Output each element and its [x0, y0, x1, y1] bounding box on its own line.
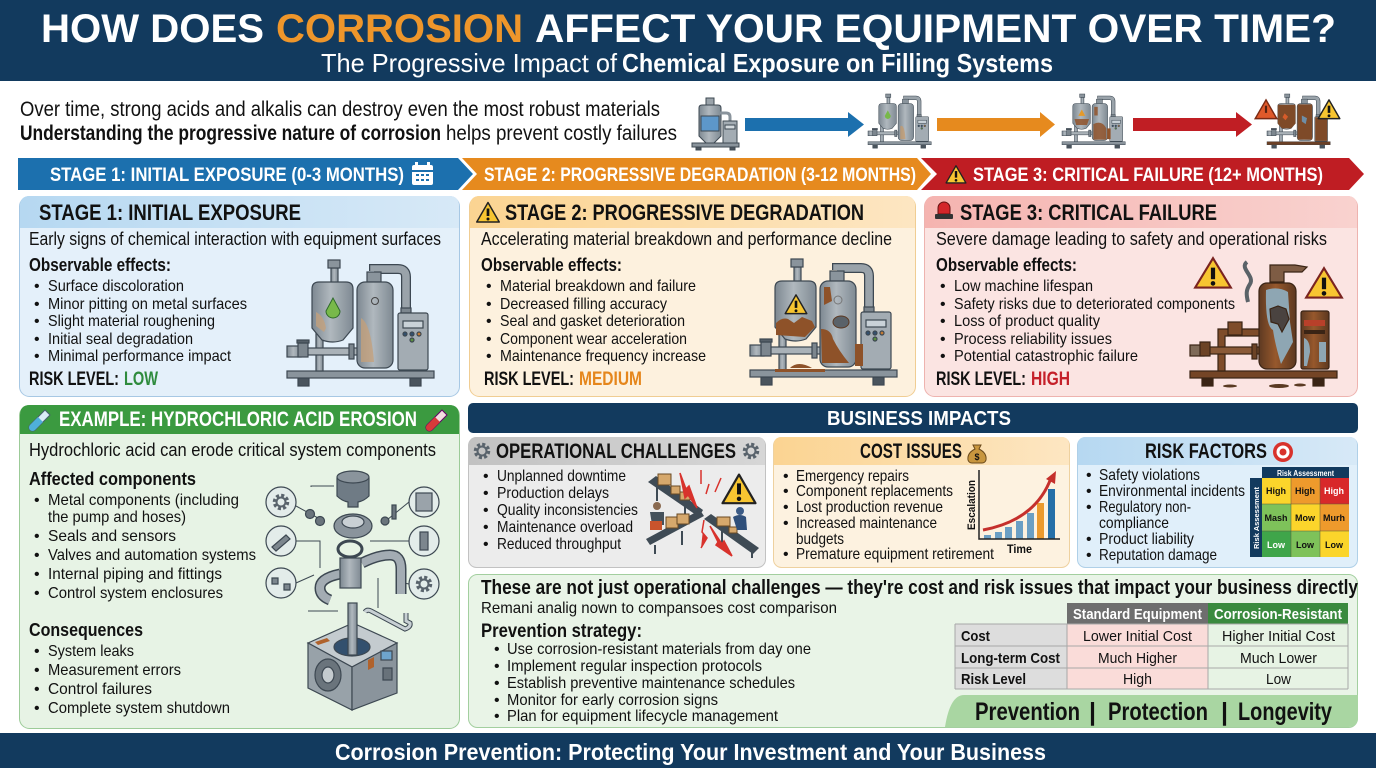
icon: warning left: [1195, 258, 1231, 288]
comparison table: High: [1123, 671, 1152, 688]
prevention strategy list: •: [494, 692, 500, 709]
chart: risk matrix: Murh: [1323, 513, 1345, 523]
intro text: [20, 98, 677, 145]
heading: EXAMPLE: HYDROCHLORIC ACID EROSION: [59, 408, 417, 431]
observable effects list: •: [486, 313, 492, 330]
chevron: stage 2: STAGE 2: PROGRESSIVE DEGRADATION (3-12 MONTHS): [484, 165, 916, 186]
illustration: rusting machine: [750, 259, 897, 385]
illustration: failed machine: [1190, 258, 1342, 388]
panel: stage 1 initial exposure: [20, 196, 460, 396]
slogan band: [945, 695, 1358, 727]
observable effects list: •: [34, 331, 40, 348]
risk level: RISK LEVEL:: [29, 369, 119, 390]
list: •: [1086, 531, 1092, 548]
list: Maintenance overload: [497, 519, 633, 536]
icon: gear right: [744, 444, 758, 458]
consequences list: System leaks: [48, 643, 134, 660]
illustration: exploded pump diagram: [266, 471, 439, 710]
title: CORROSION: [276, 7, 523, 51]
observable effects list: Low machine lifespan: [954, 278, 1093, 295]
list: Environmental incidents: [1099, 483, 1245, 500]
list: •: [1086, 547, 1092, 564]
comparison table: Much Lower: [1240, 650, 1317, 667]
observable effects list: Observable effects:: [29, 255, 171, 275]
panel: prevention and comparison: [468, 574, 1359, 728]
comparison table: Much Higher: [1098, 650, 1177, 667]
list: Lost production revenue: [796, 499, 943, 516]
panel: cost issues: [774, 437, 1070, 568]
chart: risk matrix: Low: [1296, 540, 1315, 550]
observable effects list: [936, 255, 1235, 365]
list: Emergency repairs: [796, 468, 909, 485]
observable effects list: •: [34, 296, 40, 313]
heading: COST ISSUES: [860, 440, 962, 463]
icon: calendar: [412, 162, 433, 185]
risk level: MEDIUM: [579, 369, 642, 390]
prevention strategy list: •: [494, 708, 500, 725]
icon: warning: [722, 475, 756, 503]
comparison table: [955, 603, 1348, 689]
business impacts bar: BUSINESS IMPACTS: [827, 408, 1011, 430]
observable effects list: [29, 255, 247, 365]
prevention strategy list: Plan for equipment lifecycle management: [507, 708, 779, 725]
prevention strategy list: •: [494, 658, 500, 675]
observable effects list: Seal and gasket deterioration: [500, 313, 685, 330]
observable effects list: Initial seal degradation: [48, 331, 193, 348]
stage chevrons: [18, 158, 1364, 190]
observable effects list: Observable effects:: [481, 255, 622, 275]
chart: risk matrix: Risk Assessment: [1254, 486, 1261, 549]
chart: cost escalation: Escalation: [966, 480, 978, 530]
list: Reputation damage: [1099, 547, 1217, 564]
consequences list: Control failures: [48, 681, 152, 698]
observable effects list: Process reliability issues: [954, 331, 1112, 348]
icon: rusting machine: [1062, 94, 1125, 148]
list: [783, 468, 994, 563]
header banner: [0, 0, 1376, 81]
list: •: [483, 502, 489, 519]
list: •: [783, 468, 789, 485]
title: [41, 7, 1336, 51]
list: •: [783, 546, 789, 563]
icon: test tube left: [29, 410, 50, 431]
list: •: [483, 485, 489, 502]
comparison table: Cost: [961, 628, 990, 645]
chart: risk matrix: Mash: [1264, 513, 1288, 523]
observable effects list: •: [940, 313, 946, 330]
list: •: [483, 468, 489, 485]
chart: cost escalation: Time: [1007, 542, 1032, 556]
observable effects list: •: [34, 313, 40, 330]
observable effects list: •: [940, 348, 946, 365]
observable effects list: Minimal performance impact: [48, 348, 232, 365]
slogan band: Protection: [1108, 698, 1208, 726]
chevron: stage 1: [18, 158, 473, 190]
business impacts bar: [468, 403, 1358, 433]
arrow: red: [1133, 112, 1252, 137]
affected components list: •: [34, 492, 40, 509]
heading: STAGE 1: INITIAL EXPOSURE: [39, 200, 301, 225]
heading: STAGE 3: CRITICAL FAILURE: [960, 200, 1217, 225]
chart: risk matrix: Risk Assessment: [1277, 469, 1334, 478]
consequences list: •: [34, 700, 40, 717]
arrow: orange: [937, 112, 1055, 137]
chart: risk matrix: Low: [1325, 540, 1344, 550]
consequences list: Complete system shutdown: [48, 700, 230, 717]
affected components list: [29, 469, 256, 602]
list: Production delays: [497, 485, 609, 502]
consequences list: Consequences: [29, 620, 143, 640]
observable effects list: Observable effects:: [936, 255, 1077, 275]
icon: warning right: [1306, 268, 1342, 298]
heading: OPERATIONAL CHALLENGES: [496, 440, 736, 463]
list: •: [1086, 499, 1092, 516]
icon: clean machine: [692, 98, 739, 150]
risk level: HIGH: [1031, 369, 1070, 390]
observable effects list: •: [486, 296, 492, 313]
consequences list: Measurement errors: [48, 662, 181, 679]
observable effects list: [481, 255, 706, 365]
icon: warning: [946, 166, 966, 183]
illustration: broken conveyor: [646, 470, 759, 558]
heading: RISK FACTORS: [1145, 440, 1267, 463]
affected components list: •: [34, 528, 40, 545]
panel: operational challenges: [468, 437, 766, 568]
list: •: [783, 515, 789, 532]
prevention strategy list: Monitor for early corrosion signs: [507, 692, 718, 709]
description: Early signs of chemical interaction with equipment surfaces: [29, 229, 441, 249]
intro text: Over time, strong acids and alkalis can destroy even the most robust materials: [20, 98, 660, 121]
chevron: stage 2: [462, 158, 931, 190]
prevention strategy list: Implement regular inspection protocols: [507, 658, 762, 675]
risk level: RISK LEVEL:: [936, 369, 1026, 390]
list: •: [783, 499, 789, 516]
consequences list: •: [34, 662, 40, 679]
list: [483, 468, 638, 553]
consequences list: [29, 620, 230, 717]
progression strip: machines and arrows: [692, 94, 1340, 150]
affected components list: •: [34, 566, 40, 583]
list: •: [1086, 467, 1092, 484]
observable effects list: Loss of product quality: [954, 313, 1100, 330]
note line: Remani analig nown to compansoes cost comparison: [481, 600, 837, 617]
panel: hydrochloric acid example: [20, 405, 460, 728]
title: HOW DOES: [41, 7, 264, 51]
list: Unplanned downtime: [497, 468, 626, 485]
observable effects list: Minor pitting on metal surfaces: [48, 296, 247, 313]
observable effects list: Material breakdown and failure: [500, 278, 696, 295]
chart: risk matrix: High: [1266, 486, 1286, 496]
list: •: [1086, 483, 1092, 500]
chart: risk matrix: High: [1295, 486, 1315, 496]
prevention strategy list: •: [494, 641, 500, 658]
list: budgets: [796, 531, 844, 548]
icon: target: [1273, 442, 1293, 462]
icon: test tube right: [426, 410, 447, 431]
risk level: LOW: [124, 369, 158, 390]
prevention strategy list: Establish preventive maintenance schedules: [507, 675, 795, 692]
observable effects list: Surface discoloration: [48, 278, 184, 295]
prevention strategy list: •: [494, 675, 500, 692]
observable effects list: Safety risks due to deteriorated components: [954, 296, 1235, 313]
panel: stage 2 progressive degradation: [470, 196, 916, 396]
icon: gear left: [476, 444, 488, 458]
list: Quality inconsistencies: [497, 502, 638, 519]
arrow: blue: [745, 112, 864, 137]
chevron: stage 1: STAGE 1: INITIAL EXPOSURE (0-3 MONTHS): [50, 165, 404, 186]
observable effects list: Potential catastrophic failure: [954, 348, 1138, 365]
icon: alarm siren: [935, 202, 953, 219]
chart: risk matrix: [1250, 467, 1349, 557]
list: •: [483, 536, 489, 553]
chart: risk matrix: Mow: [1295, 513, 1316, 523]
footer banner: Corrosion Prevention: Protecting Your Investment and Your Business: [335, 739, 1046, 765]
list: •: [783, 483, 789, 500]
list: Component replacements: [796, 483, 953, 500]
observable effects list: •: [486, 348, 492, 365]
comparison table: Lower Initial Cost: [1083, 628, 1193, 645]
affected components list: Valves and automation systems: [48, 547, 256, 564]
heading: STAGE 2: PROGRESSIVE DEGRADATION: [505, 200, 864, 225]
chevron: stage 3: STAGE 3: CRITICAL FAILURE (12+ MONTHS): [973, 165, 1323, 186]
chart: risk matrix: High: [1324, 486, 1344, 496]
affected components list: Internal piping and fittings: [48, 566, 222, 583]
affected components list: •: [34, 547, 40, 564]
icon: money bag: [968, 445, 986, 463]
icon: money bag: $: [974, 452, 980, 462]
slogan band: |: [1089, 698, 1096, 726]
affected components list: Affected components: [29, 469, 196, 489]
chart: cost escalation: [966, 470, 1060, 556]
observable effects list: Maintenance frequency increase: [500, 348, 706, 365]
comparison table: Corrosion-Resistant: [1214, 606, 1342, 623]
observable effects list: •: [940, 278, 946, 295]
consequences list: •: [34, 643, 40, 660]
subtitle: [321, 48, 1053, 78]
subtitle: Chemical Exposure on Filling Systems: [622, 48, 1053, 78]
risk level: RISK LEVEL:: [484, 369, 574, 390]
comparison table: Long-term Cost: [961, 650, 1060, 667]
comparison table: Higher Initial Cost: [1222, 628, 1336, 645]
slogan band: |: [1221, 698, 1228, 726]
list: Regulatory non-: [1099, 499, 1191, 516]
description: Accelerating material breakdown and performance decline: [481, 229, 892, 249]
observable effects list: Component wear acceleration: [500, 331, 687, 348]
list: Reduced throughput: [497, 536, 621, 553]
comparison table: Standard Equipment: [1073, 606, 1202, 623]
list: Premature equipment retirement: [796, 546, 994, 563]
description: Severe damage leading to safety and operational risks: [936, 229, 1327, 249]
observable effects list: •: [34, 278, 40, 295]
description: Hydrochloric acid can erode critical system components: [29, 440, 436, 460]
observable effects list: •: [486, 331, 492, 348]
comparison table: Risk Level: [961, 671, 1026, 688]
prevention strategy list: [481, 621, 811, 725]
list: [1086, 467, 1245, 564]
icon: warning: [477, 202, 499, 222]
observable effects list: •: [34, 348, 40, 365]
observable effects list: Decreased filling accuracy: [500, 296, 667, 313]
observable effects list: •: [486, 278, 492, 295]
list: •: [483, 519, 489, 536]
consequences list: •: [34, 681, 40, 698]
comparison table: Low: [1266, 671, 1291, 688]
list: Increased maintenance: [796, 515, 937, 532]
observable effects list: •: [940, 296, 946, 313]
list: Product liability: [1099, 531, 1194, 548]
observable effects list: Slight material roughening: [48, 313, 215, 330]
affected components list: Metal components (including: [48, 492, 239, 509]
panel: stage 3 critical failure: [924, 196, 1358, 396]
chevron: stage 3: [921, 158, 1364, 190]
icon: failed machine with warnings: [1255, 94, 1340, 148]
subtitle: The Progressive Impact of: [321, 48, 618, 78]
affected components list: Seals and sensors: [48, 528, 176, 545]
intro text: helps prevent costly failures: [446, 122, 677, 145]
slogan band: Prevention: [975, 698, 1080, 726]
title: AFFECT YOUR EQUIPMENT OVER TIME?: [535, 7, 1336, 51]
chart: risk matrix: Low: [1267, 540, 1286, 550]
illustration: machine with light corrosion: [287, 260, 434, 386]
affected components list: •: [34, 585, 40, 602]
observable effects list: •: [940, 331, 946, 348]
affected components list: the pump and hoses): [48, 509, 186, 526]
icon: early corroded machine: [868, 94, 931, 148]
slogan band: Longevity: [1238, 698, 1332, 726]
intro text: Understanding the progressive nature of corrosion: [20, 122, 441, 145]
panel: risk factors: [1078, 437, 1358, 568]
affected components list: Control system enclosures: [48, 585, 223, 602]
list: Safety violations: [1099, 467, 1200, 484]
prevention strategy list: Prevention strategy:: [481, 621, 642, 642]
footer banner: [0, 733, 1376, 768]
list: compliance: [1099, 515, 1169, 532]
prevention strategy list: Use corrosion-resistant materials from day one: [507, 641, 811, 658]
